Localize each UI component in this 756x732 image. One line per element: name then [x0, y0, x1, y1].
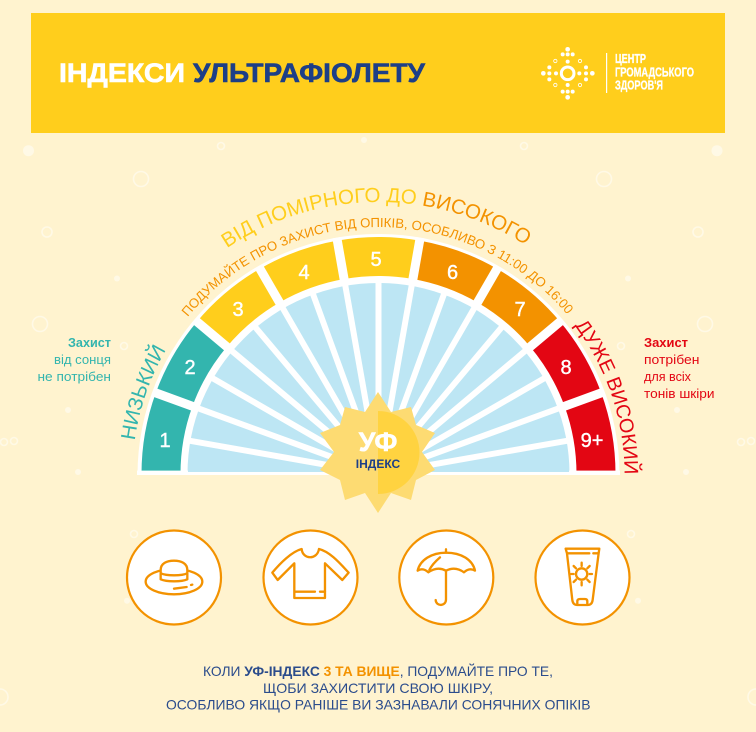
bottom message — [166, 662, 590, 712]
arc label: low: НИЗЬКИЙ — [121, 344, 166, 439]
segment numbers: 2 — [184, 357, 196, 379]
bottom message: ОСОБЛИВО ЯКЩО РАНІШЕ ВИ ЗАЗНАВАЛИ СОНЯЧНИХ ОПІКІВ — [166, 696, 590, 712]
side note: no protection needed: Захист — [68, 335, 111, 350]
logo: Центр громадського здоров'я — [541, 47, 694, 100]
sun badge: ІНДЕКС — [356, 457, 401, 471]
segment numbers: 4 — [298, 262, 310, 284]
segment numbers: 1 — [159, 430, 171, 452]
segment numbers — [159, 249, 603, 452]
white base disc — [138, 234, 620, 475]
icon: sunscreen tube — [536, 530, 630, 624]
coloured risk segments — [161, 256, 596, 474]
title: ІНДЕКСИ — [59, 58, 185, 88]
side note: protection needed: для всіх — [644, 369, 691, 384]
blue rays — [182, 274, 576, 474]
side note: no protection needed: від сонця — [54, 352, 111, 367]
header banner — [31, 13, 725, 133]
title: УЛЬТРАФІОЛЕТУ — [193, 58, 426, 88]
arc label: very high: ДУЖЕ ВИСОКИЙ — [572, 321, 642, 473]
segment numbers: 3 — [232, 299, 244, 321]
arc heading: moderate to high: ВІД ПОМІРНОГО ДО ВИСОКОГО — [220, 188, 530, 248]
segment numbers: 7 — [514, 299, 526, 321]
bottom message: КОЛИ УФ-ІНДЕКС 3 ТА ВИЩЕ, ПОДУМАЙТЕ ПРО ТЕ, — [203, 662, 553, 679]
side note: no protection needed — [38, 335, 111, 384]
arc subheading: burn protection hours: ПОДУМАЙТЕ ПРО ЗАХИСТ ВІД ОПІКІВ, ОСОБЛИВО З 11:00 ДО 16:00 — [182, 218, 573, 316]
side note: no protection needed: не потрібен — [38, 369, 111, 384]
side note: protection needed: тонів шкіри — [644, 386, 714, 401]
side note: protection needed: потрібен — [644, 352, 700, 367]
logo: Центр громадського здоров'я: ЦЕНТР — [615, 52, 646, 66]
side note: protection needed: Захист — [644, 335, 688, 350]
segment numbers: 8 — [560, 357, 572, 379]
logo: Центр громадського здоров'я: ГРОМАДСЬКОГО — [615, 66, 694, 80]
background bubbles — [0, 137, 756, 705]
icon: long-sleeved shirt — [264, 530, 358, 624]
title — [59, 58, 426, 88]
sun badge: УФ — [359, 427, 397, 457]
segment numbers: 6 — [447, 262, 458, 284]
logo: Центр громадського здоров'я: ЗДОРОВ'Я — [615, 78, 663, 92]
segment numbers: 5 — [370, 249, 382, 271]
icon: umbrella — [399, 530, 493, 624]
sun badge — [320, 392, 435, 513]
icon: hat — [127, 530, 221, 624]
segment numbers: 9+ — [581, 430, 603, 452]
side note: protection needed — [644, 335, 714, 401]
bottom message: ЩОБИ ЗАХИСТИТИ СВОЮ ШКІРУ, — [263, 680, 493, 696]
UV index semicircle gauge — [137, 234, 620, 475]
